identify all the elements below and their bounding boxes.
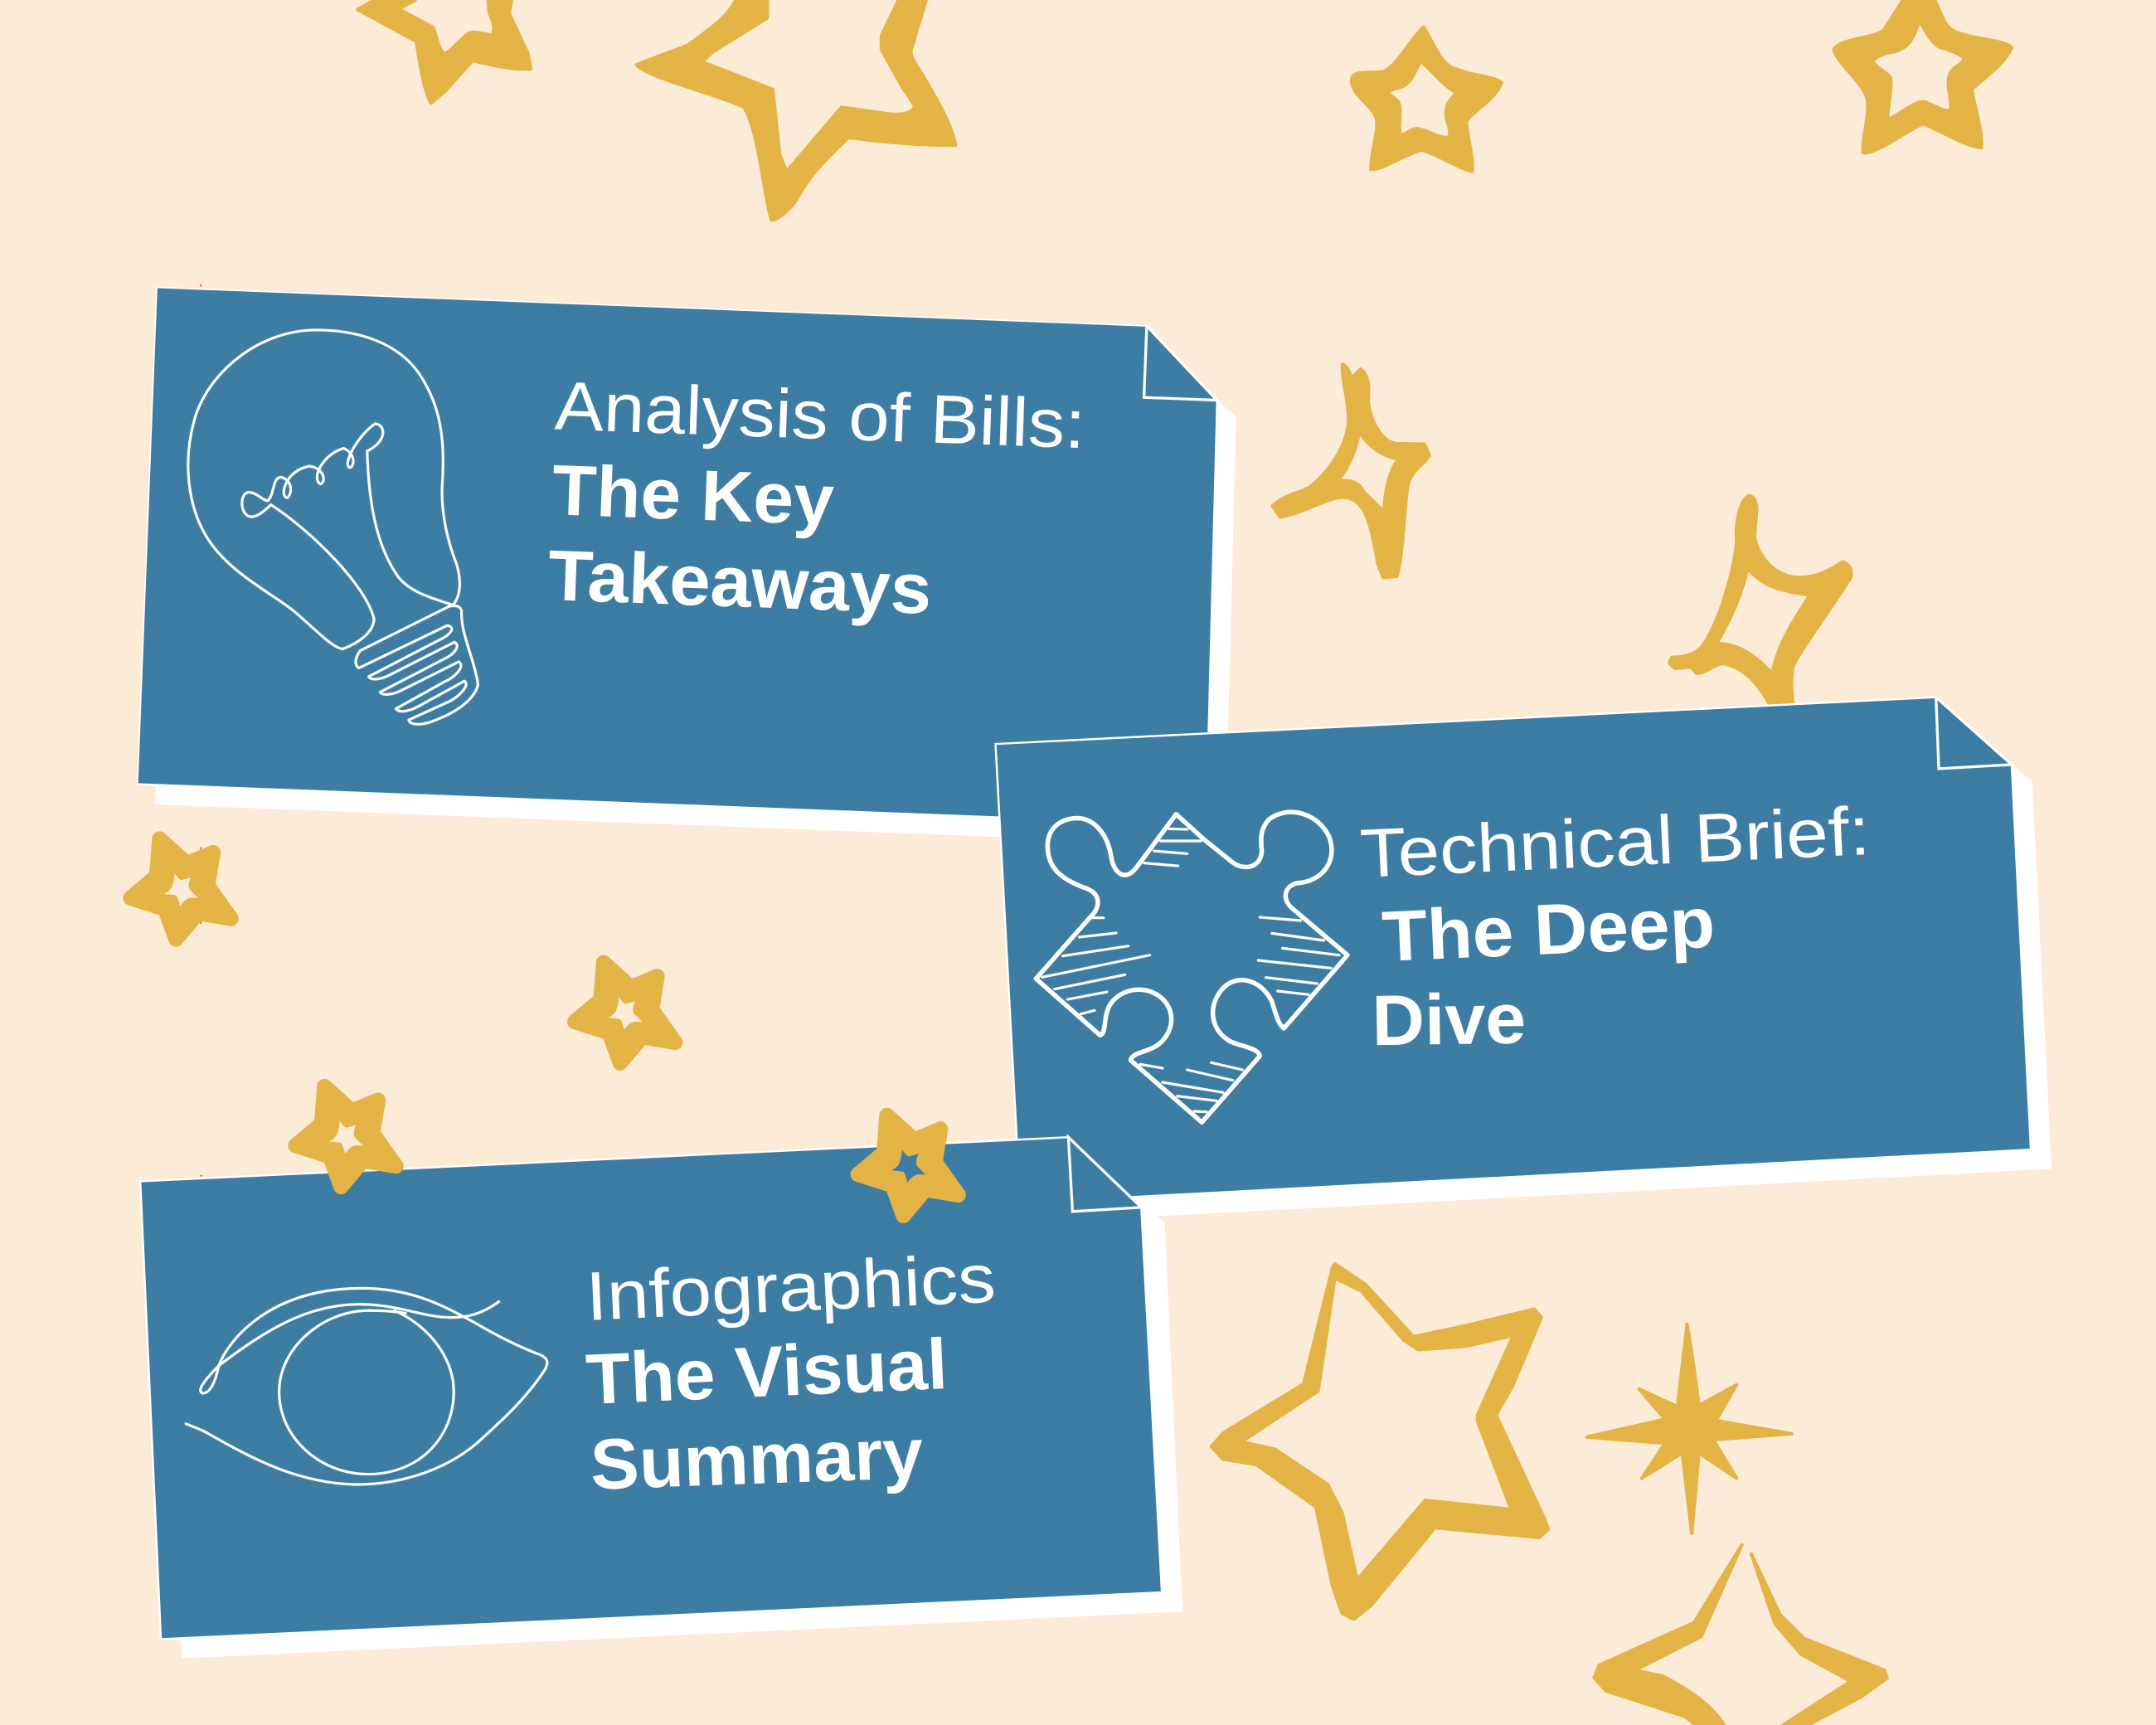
sparkle: right [1669,496,1851,704]
text: The Visual: The Visual [585,1324,949,1420]
small star: far left [131,838,231,940]
star: top left [357,0,531,103]
star: top large [637,0,955,220]
text: card 1 subtitle: Analysis of Bills: [554,367,1087,463]
card 1: The Key Takeaways [138,288,1236,846]
card 2: The Deep Dive [996,697,2052,1217]
card 2 panel [996,697,2031,1203]
small star: centre [575,963,675,1063]
text: Takeaways: Takeaways [546,536,933,629]
brush star: eight point sparkle [1587,1324,1792,1533]
icon: eye [186,1288,547,1484]
brush sparkle: bottom [1594,1545,1887,1725]
card 2 white shadow [1017,765,2052,1217]
card 1 panel [138,288,1216,825]
card 3 white shadow [161,1208,1182,1659]
icon: light bulb [188,330,478,724]
sparkle: upper [1273,364,1430,577]
text: card 2 subtitle: Technical Brief: [1358,792,1872,892]
card 3 page fold [1068,1137,1141,1212]
icon: puzzle piece [1036,812,1348,1122]
small star: on card 3 left [296,1086,396,1187]
small star: on card 3 right [858,1115,959,1216]
star: top centre right [1352,27,1502,172]
star: top far right [1833,0,2012,153]
text: card 3 subtitle: Infographics [585,1239,997,1335]
text: The Key: The Key [551,450,835,541]
card 3 panel [140,1137,1162,1640]
card 2 page fold [1936,697,2012,769]
card 1 white shadow [138,401,1236,846]
text: Summary: Summary [589,1414,925,1505]
text: The Deep: The Deep [1381,883,1717,977]
card 1 page fold [1144,326,1216,401]
text: Dive: Dive [1372,979,1527,1061]
card 3: The Visual Summary [140,1137,1182,1659]
brush star: large [1212,1264,1548,1619]
